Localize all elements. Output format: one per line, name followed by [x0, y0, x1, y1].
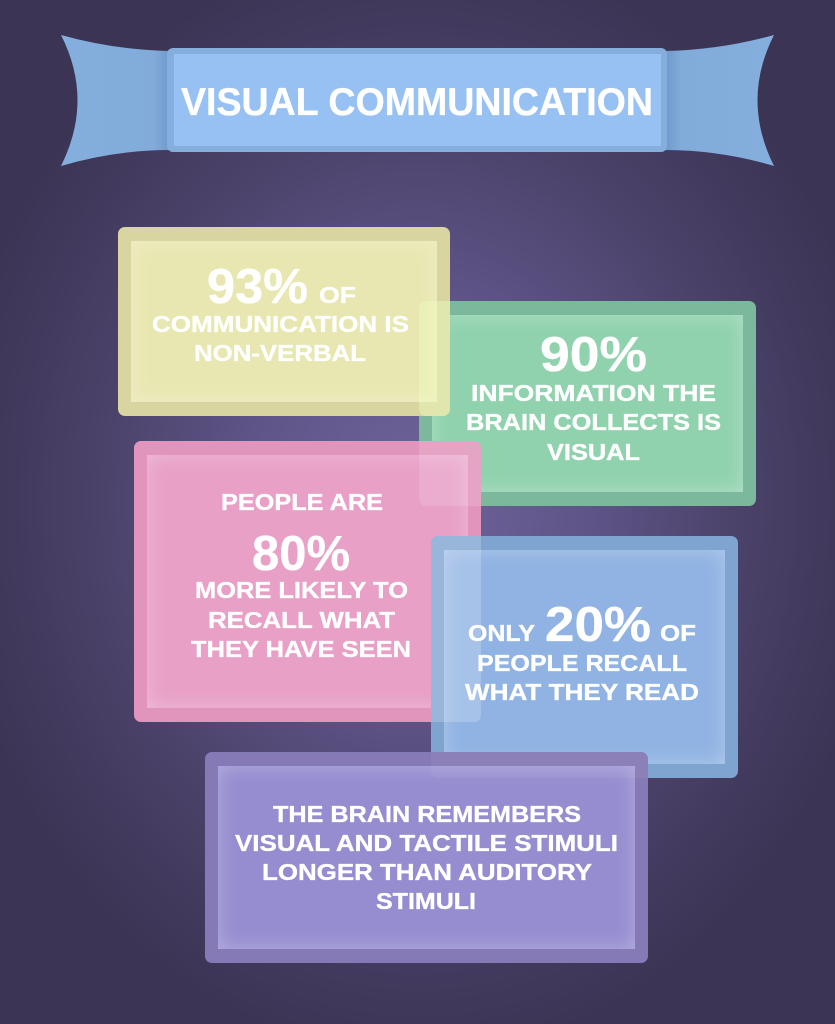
title text: VISUAL COMMUNICATION	[181, 81, 653, 124]
panel: 93% non-verbal (yellow)	[118, 227, 450, 416]
left ribbon wing	[61, 35, 170, 166]
text: information the brain collects is visual	[466, 380, 721, 465]
panel: brain remembers (purple)	[205, 752, 648, 963]
stat: only 20% of	[468, 598, 696, 652]
text: the brain remembers visual and tactile stimuli longer than auditory stimuli	[235, 801, 618, 914]
text: communication is non-verbal	[152, 311, 409, 366]
stat: only 20% of: 20%	[545, 598, 651, 652]
text: people recall what they read: PEOPLE RECALL	[477, 650, 687, 676]
text: more likely to recall what they have seen	[191, 577, 411, 662]
stat: 93% of	[207, 260, 356, 314]
panel: 80% recall (pink)	[134, 441, 481, 722]
stat: only 20% of: ONLY	[468, 620, 535, 646]
text: communication is non-verbal: COMMUNICATION IS	[152, 311, 409, 337]
text: more likely to recall what they have seen: MORE LIKELY TO	[195, 577, 408, 603]
text: information the brain collects is visual: BRAIN COLLECTS IS	[466, 409, 721, 435]
stat: 93% of: 93%	[207, 260, 308, 314]
text: more likely to recall what they have seen: THEY HAVE SEEN	[191, 636, 411, 662]
text: people recall what they read: WHAT THEY READ	[465, 679, 699, 705]
text: the brain remembers visual and tactile stimuli longer than auditory stimuli: STIMULI	[376, 888, 476, 914]
stat: 93% of: OF	[319, 282, 356, 308]
banner plate	[167, 48, 667, 152]
text: people are: PEOPLE ARE	[221, 489, 383, 515]
text: the brain remembers visual and tactile stimuli longer than auditory stimuli: LONGER THAN AUDITORY	[262, 859, 592, 885]
text: communication is non-verbal: NON-VERBAL	[194, 340, 366, 366]
text: the brain remembers visual and tactile stimuli longer than auditory stimuli: VISUAL AND TACTILE STIMULI	[235, 830, 618, 856]
text: information the brain collects is visual: INFORMATION THE	[471, 380, 716, 406]
text: the brain remembers visual and tactile stimuli longer than auditory stimuli: THE BRAIN REMEMBERS	[273, 801, 581, 827]
stat: 80%: 80%	[252, 527, 350, 581]
text: people recall what they read	[465, 650, 699, 705]
title banner	[61, 35, 774, 166]
panel: 20% recall (blue)	[431, 536, 738, 778]
text: more likely to recall what they have seen: RECALL WHAT	[208, 607, 396, 633]
stat: only 20% of: OF	[660, 620, 696, 646]
text: information the brain collects is visual: VISUAL	[547, 439, 640, 465]
right ribbon wing	[665, 35, 774, 166]
panel: 90% information (green)	[419, 301, 756, 506]
stat: 90%: 90%	[540, 328, 647, 382]
